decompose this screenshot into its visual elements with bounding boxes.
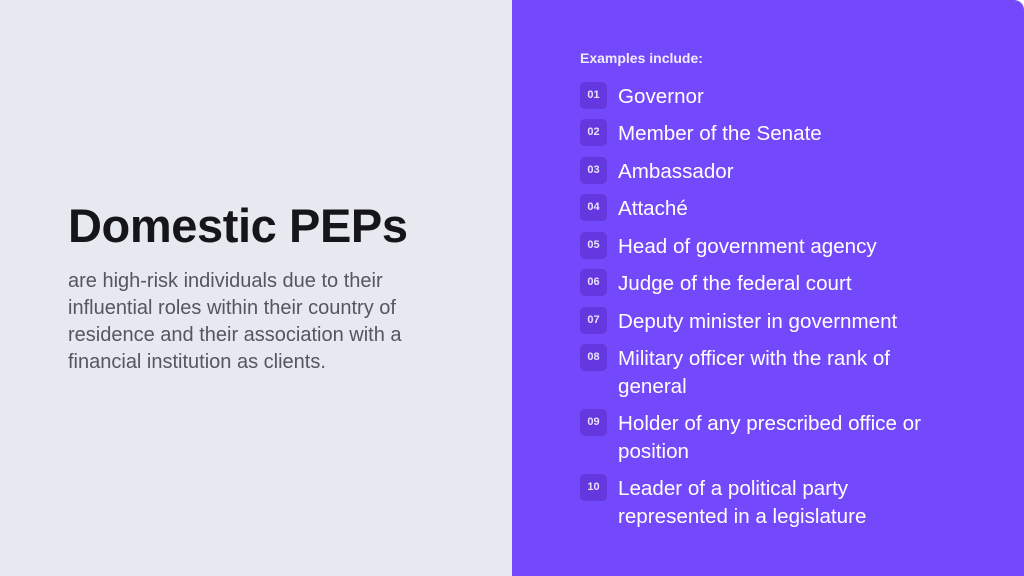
text: general xyxy=(618,374,687,398)
text: 04 xyxy=(587,201,600,213)
text: Ambassador xyxy=(618,160,734,183)
text: 06 xyxy=(587,276,600,288)
title: Domestic PEPs xyxy=(68,199,408,252)
text: 03 xyxy=(587,164,600,176)
text: 10 xyxy=(587,481,600,493)
text: represented in a legislature xyxy=(618,504,866,528)
text: 07 xyxy=(587,314,600,326)
text: Leader of a political party xyxy=(618,477,848,500)
text: Military officer with the rank of xyxy=(618,347,890,370)
item 07 xyxy=(580,307,898,334)
description text: financial institution as clients. xyxy=(68,351,326,373)
item 03 xyxy=(580,157,734,184)
item 04 xyxy=(580,194,688,221)
panel: left xyxy=(0,0,512,576)
item 06 xyxy=(580,269,852,296)
text: position xyxy=(618,440,689,462)
item 01 xyxy=(580,82,704,109)
description text: influential roles within their country of xyxy=(68,297,396,319)
item 10 xyxy=(580,474,866,528)
text: 02 xyxy=(587,126,600,138)
text: 01 xyxy=(587,89,600,101)
item 02 xyxy=(580,119,822,146)
panel: right xyxy=(512,0,1024,576)
text: Judge of the federal court xyxy=(618,272,852,295)
item 09 xyxy=(580,409,921,462)
text: Member of the Senate xyxy=(618,122,822,145)
description text xyxy=(68,270,402,373)
text: 08 xyxy=(587,351,600,363)
description text: are high-risk individuals due to their xyxy=(68,270,383,292)
text: Governor xyxy=(618,85,704,108)
text: 09 xyxy=(587,416,600,428)
item 05 xyxy=(580,232,877,259)
text: Deputy minister in government xyxy=(618,310,897,333)
text: Attaché xyxy=(618,197,688,220)
description text: residence and their association with a xyxy=(68,324,402,346)
list heading: Examples include: xyxy=(580,50,703,66)
text: 05 xyxy=(587,239,600,251)
item 08 xyxy=(580,344,890,398)
text: Holder of any prescribed office or xyxy=(618,412,921,435)
text: Head of government agency xyxy=(618,235,877,258)
